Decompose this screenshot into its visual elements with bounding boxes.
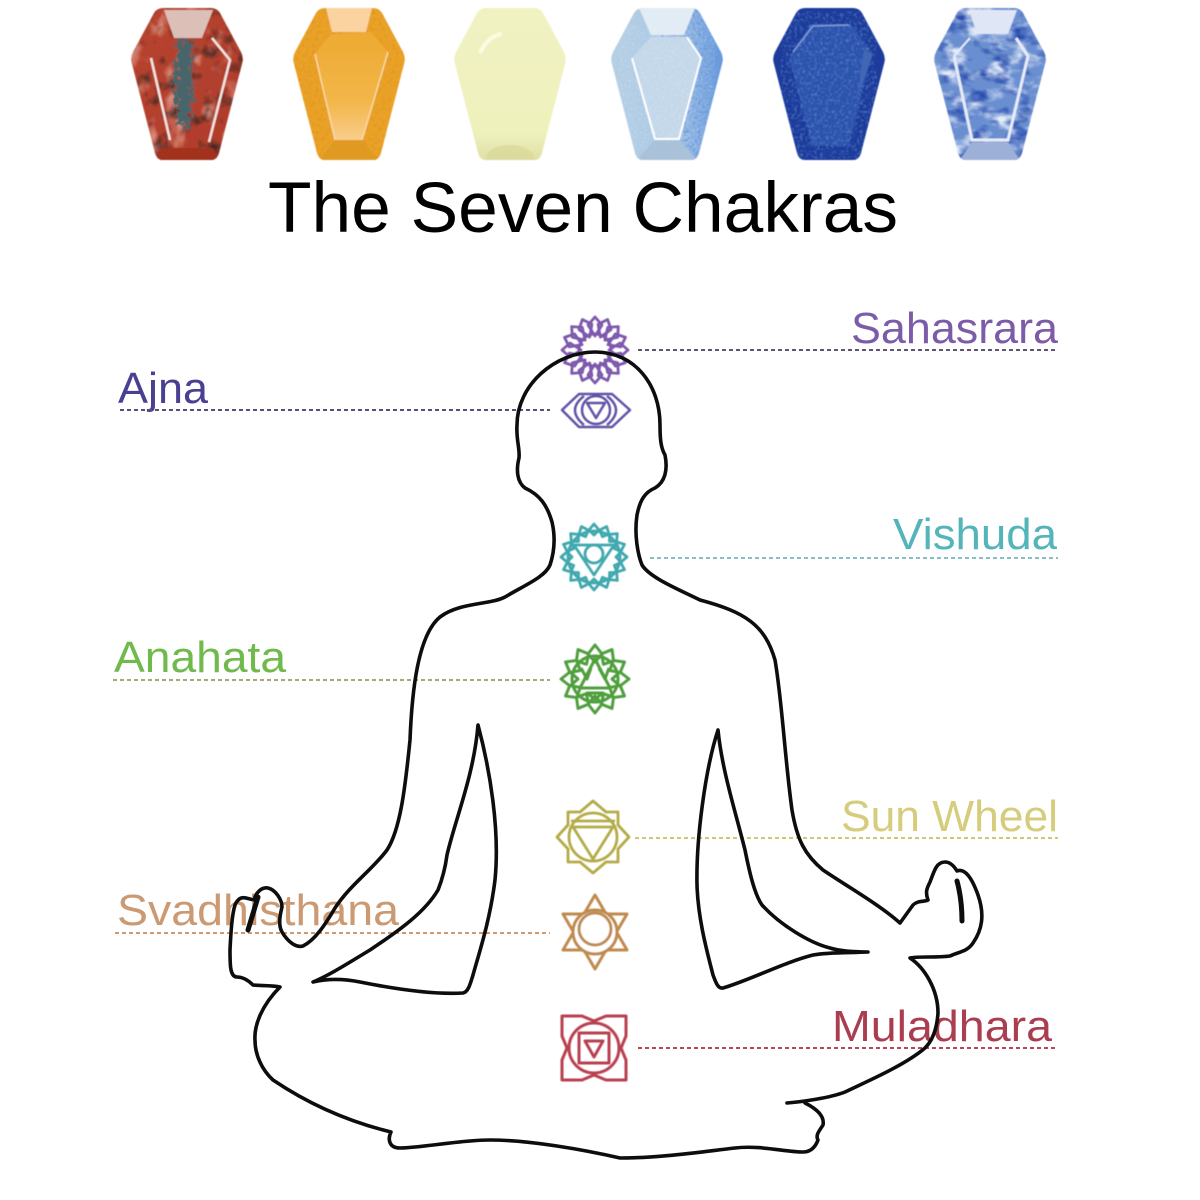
meditating figure outline bbox=[230, 352, 982, 1158]
label: Sahasrara: Sahasrara bbox=[851, 304, 1059, 353]
body outline bbox=[230, 352, 982, 1158]
gem: lapis lazuli bbox=[769, 6, 889, 164]
icon: Ajna third eye chakra bbox=[562, 394, 630, 427]
chakra symbols bbox=[557, 317, 630, 1080]
icon: Svadhisthana sacral chakra bbox=[563, 895, 627, 969]
left finger stroke bbox=[248, 897, 258, 930]
label: Sun Wheel: Sun Wheel bbox=[841, 792, 1058, 841]
gem: orange mookaite bbox=[289, 6, 409, 164]
gem row bbox=[127, 6, 1050, 171]
icon: Vishuda throat chakra bbox=[561, 524, 627, 590]
label: Muladhara: Muladhara bbox=[832, 1002, 1053, 1051]
left arm gap bbox=[313, 725, 496, 993]
label: Svadhisthana: Svadhisthana bbox=[117, 886, 400, 935]
right finger stroke bbox=[957, 881, 962, 921]
right arm gap bbox=[697, 730, 868, 988]
icon: Sun Wheel solar plexus chakra bbox=[557, 801, 629, 873]
title: The Seven Chakras bbox=[268, 169, 898, 248]
label: Ajna: Ajna bbox=[118, 364, 209, 413]
gem: red jasper bbox=[127, 6, 247, 164]
icon: Muladhara root chakra bbox=[562, 1016, 626, 1080]
gem: pale yellow calcite bbox=[454, 8, 566, 160]
label: Anahata: Anahata bbox=[114, 633, 287, 682]
icon: Sahasrara crown chakra bbox=[562, 317, 628, 383]
chakra labels and leader lines bbox=[113, 304, 1059, 1051]
icon: Anahata heart chakra bbox=[561, 645, 629, 713]
label: Vishuda: Vishuda bbox=[893, 510, 1058, 559]
gem: sodalite bbox=[930, 6, 1050, 164]
gem: light blue aventurine bbox=[607, 6, 727, 164]
